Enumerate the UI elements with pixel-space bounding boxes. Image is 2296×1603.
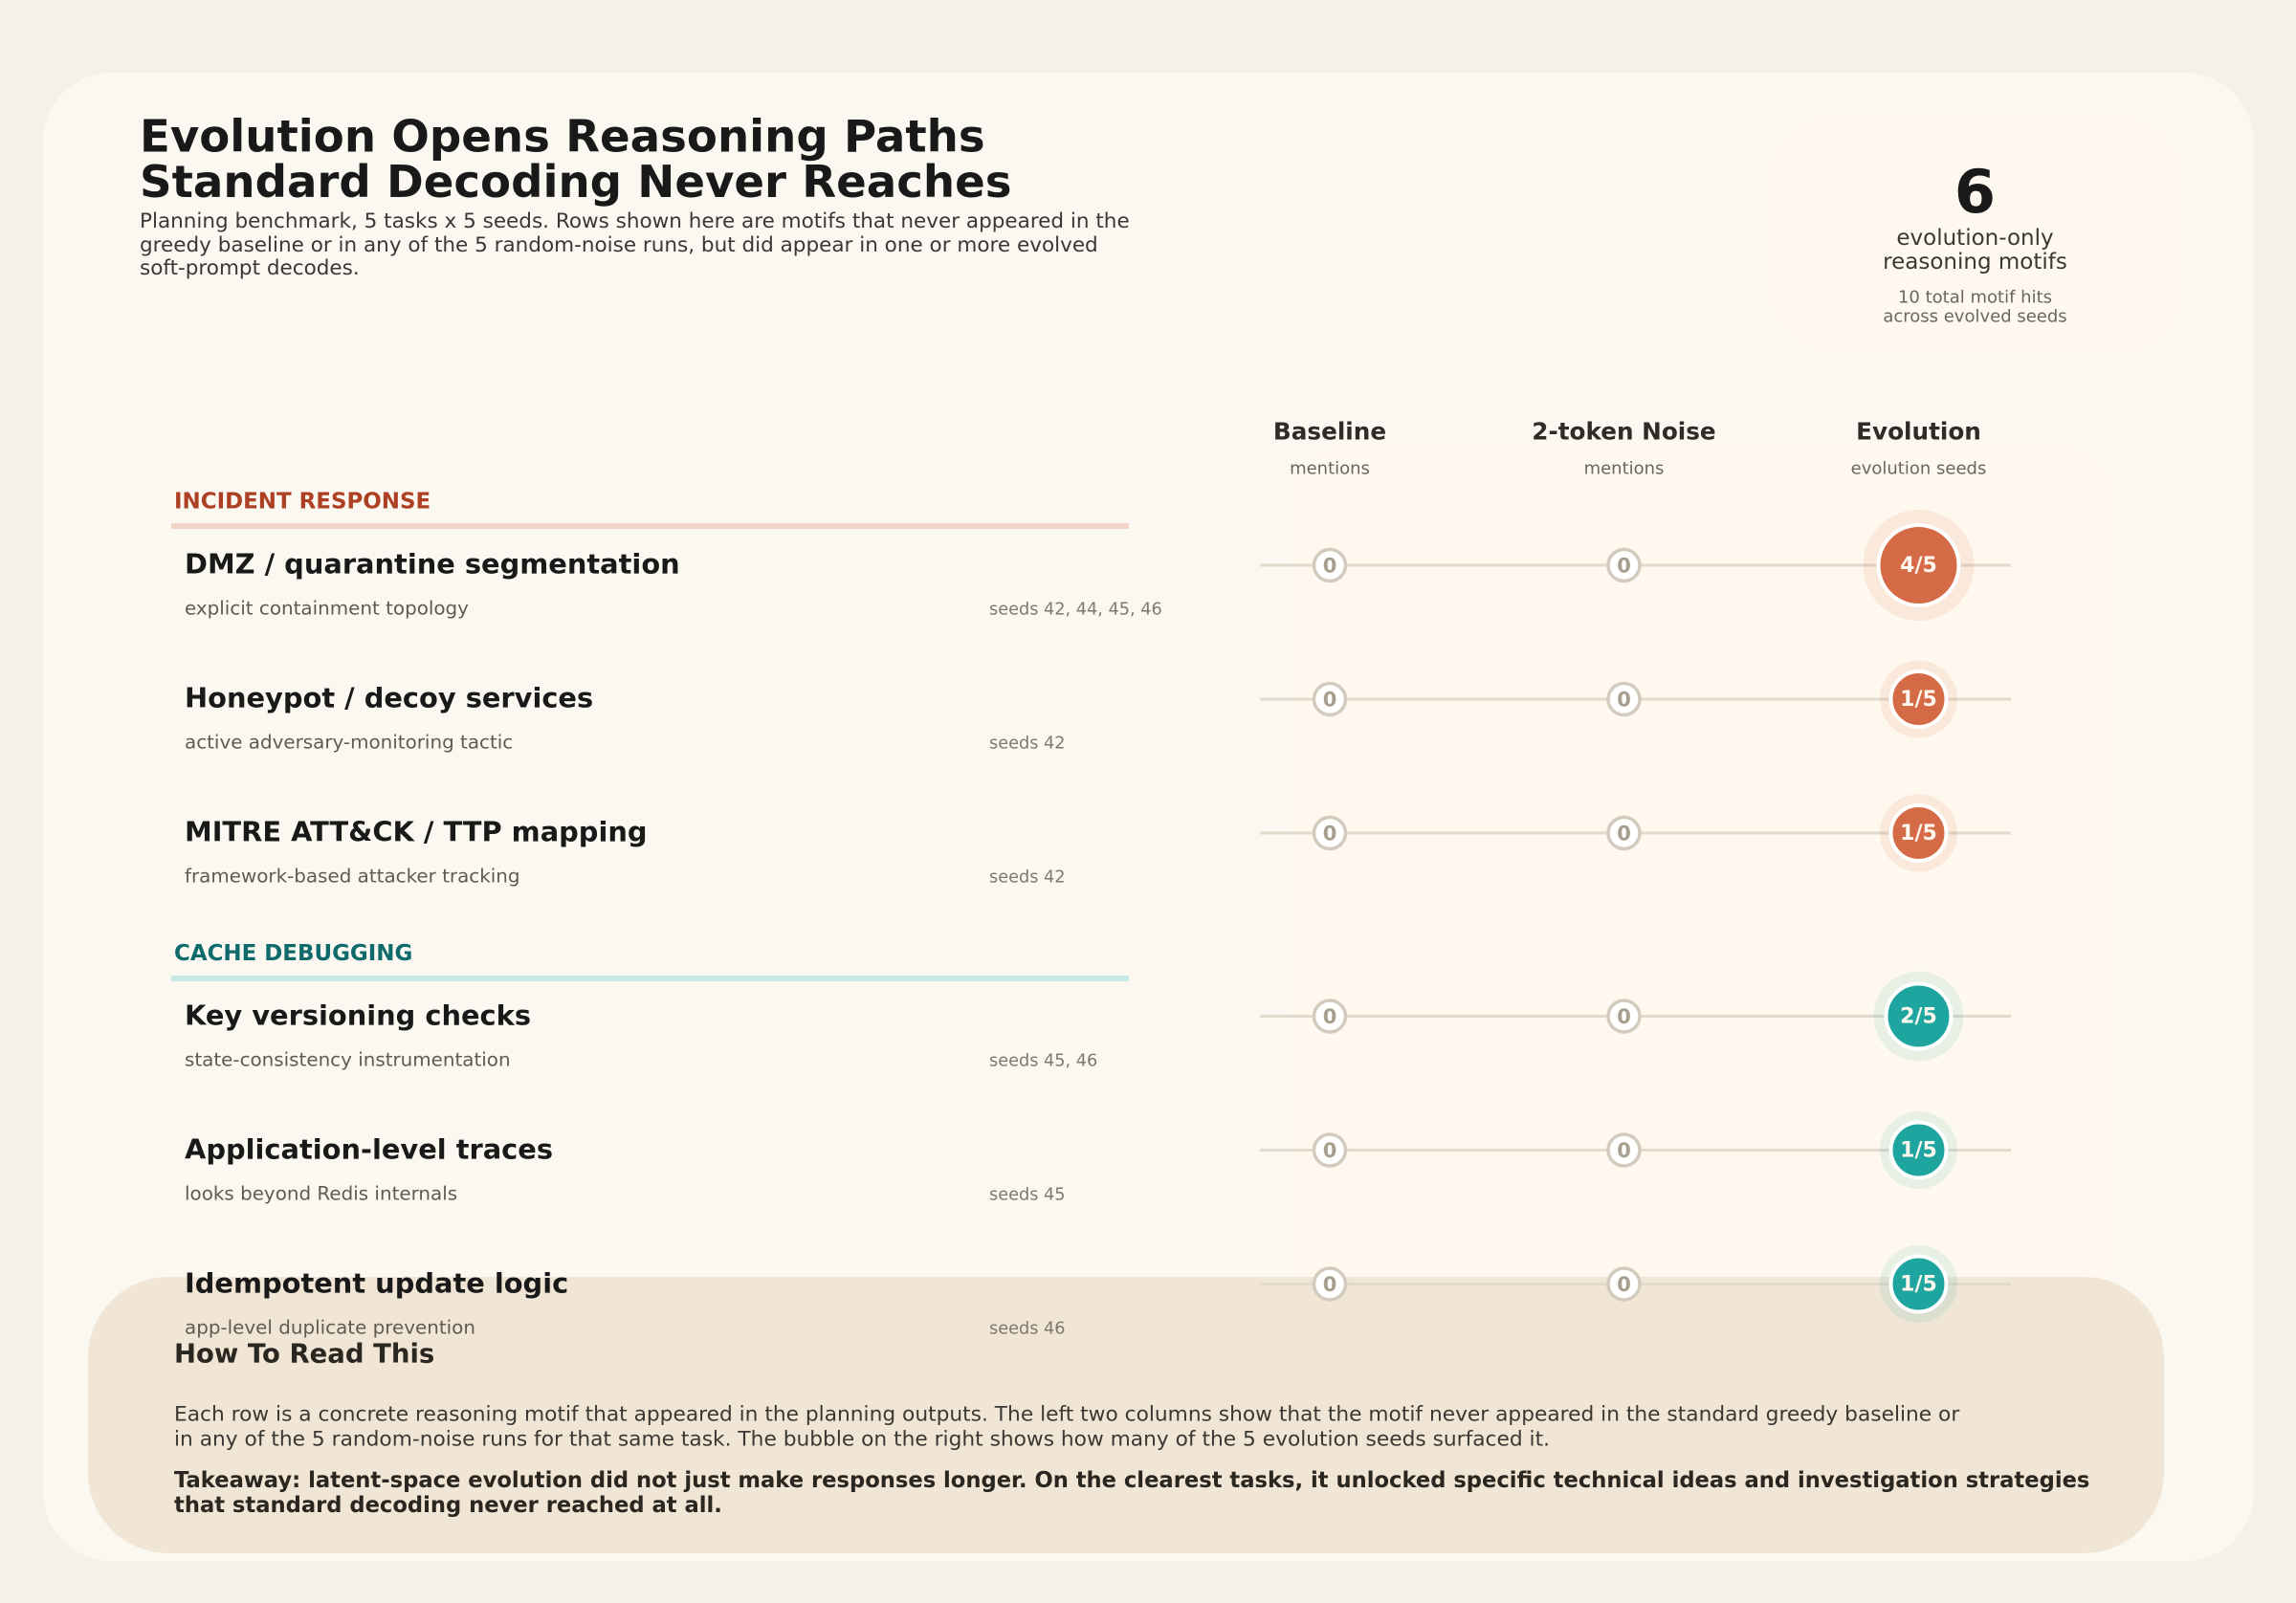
stat label: evolution-only [1896, 226, 2054, 251]
row: Application-level traces: 1/5 [1900, 1138, 1937, 1163]
row: Honeypot / decoy services: Honeypot / decoy services [185, 681, 593, 714]
row: MITRE ATT&CK / TTP mapping: seeds 42 [989, 868, 1066, 888]
how to read body: in any of the 5 random-noise runs for that same task. The bubble on the right shows how many of the 5 evolution seeds surfaced it. [174, 1427, 1550, 1452]
takeaway [174, 1468, 2089, 1518]
row: Honeypot / decoy services: 0 [1323, 689, 1336, 712]
title: Standard Decoding Never Reaches [140, 157, 1012, 209]
column headers: Evolution [1856, 417, 1981, 446]
row: MITRE ATT&CK / TTP mapping: 0 [1323, 823, 1336, 845]
row: DMZ / quarantine segmentation: DMZ / quarantine segmentation [185, 547, 680, 580]
row: Key versioning checks: 0 [1617, 1005, 1631, 1028]
row: Honeypot / decoy services: 0 [1617, 689, 1631, 712]
section heading: incident response: INCIDENT RESPONSE [174, 490, 430, 515]
stat label: reasoning motifs [1883, 250, 2067, 274]
subtitle: soft-prompt decodes. [140, 256, 360, 280]
row: Key versioning checks: state-consistency instrumentation [185, 1048, 511, 1071]
takeaway: that standard decoding never reached at all. [174, 1493, 722, 1518]
row: MITRE ATT&CK / TTP mapping: framework-based attacker tracking [185, 865, 520, 888]
panel: how to read background [88, 1277, 2164, 1553]
row: Application-level traces: 0 [1617, 1139, 1631, 1162]
row: Honeypot / decoy services: 1/5 [1900, 688, 1937, 712]
row: Idempotent update logic: seeds 46 [989, 1320, 1066, 1339]
how to read body: Each row is a concrete reasoning motif that appeared in the planning outputs. The left two columns show that the motif never appeared in the standard greedy baseline or [174, 1402, 1959, 1427]
panel: bubble column background [1289, 442, 2117, 1303]
row: Idempotent update logic: 0 [1323, 1273, 1336, 1296]
row: Application-level traces: 0 [1323, 1139, 1336, 1162]
how to read heading: How To Read This [174, 1339, 434, 1370]
subtitle: greedy baseline or in any of the 5 random-noise runs, but did appear in one or more evolved [140, 233, 1098, 257]
row: Key versioning checks: seeds 45, 46 [989, 1052, 1097, 1071]
row: MITRE ATT&CK / TTP mapping [185, 794, 2011, 888]
row: Key versioning checks: 0 [1323, 1005, 1336, 1028]
row: Application-level traces [185, 1111, 2011, 1205]
subtitle [140, 209, 1130, 280]
takeaway: Takeaway: latent-space evolution did not just make responses longer. On the clearest tasks, it unlocked specific technical ideas and investigation strategies [174, 1468, 2089, 1493]
stat note: across evolved seeds [1883, 306, 2067, 327]
row: Application-level traces: looks beyond Redis internals [185, 1182, 457, 1205]
column headers: evolution seeds [1851, 459, 1986, 478]
row: Idempotent update logic: Idempotent update logic [185, 1266, 568, 1299]
column headers [1273, 417, 1986, 478]
stat label [1883, 226, 2067, 274]
title: Evolution Opens Reasoning Paths [140, 111, 985, 163]
title [140, 111, 1012, 209]
row: MITRE ATT&CK / TTP mapping: 0 [1617, 823, 1631, 845]
stat number: 6 [1954, 157, 1996, 227]
row: Idempotent update logic [185, 1245, 2011, 1339]
row: DMZ / quarantine segmentation: explicit containment topology [185, 597, 469, 620]
subtitle: Planning benchmark, 5 tasks x 5 seeds. Rows shown here are motifs that never appeared in the [140, 209, 1130, 233]
row: DMZ / quarantine segmentation: 0 [1617, 555, 1631, 578]
column headers: mentions [1584, 459, 1664, 478]
panel: stat callout [1766, 112, 2186, 357]
stat note [1883, 287, 2067, 327]
row: Idempotent update logic: 0 [1617, 1273, 1631, 1296]
row: MITRE ATT&CK / TTP mapping: 1/5 [1900, 822, 1937, 845]
row: Application-level traces: Application-level traces [185, 1132, 553, 1165]
column headers: Baseline [1273, 417, 1386, 446]
row: Idempotent update logic: app-level duplicate prevention [185, 1316, 475, 1339]
row: DMZ / quarantine segmentation [185, 510, 2011, 621]
row: DMZ / quarantine segmentation: 0 [1323, 555, 1336, 578]
column headers: 2-token Noise [1532, 417, 1716, 446]
section heading: incident response [171, 490, 1129, 529]
row: Honeypot / decoy services: active adversary-monitoring tactic [185, 731, 513, 754]
row: Key versioning checks: 2/5 [1900, 1004, 1937, 1029]
section heading: cache debugging [171, 941, 1129, 981]
column headers: mentions [1290, 459, 1370, 478]
stat note: 10 total motif hits [1898, 287, 2052, 308]
row: MITRE ATT&CK / TTP mapping: MITRE ATT&CK / TTP mapping [185, 815, 648, 847]
row: Idempotent update logic: 1/5 [1900, 1272, 1937, 1297]
row: Key versioning checks [185, 972, 2011, 1071]
row: DMZ / quarantine segmentation: 4/5 [1900, 554, 1937, 578]
how to read body [174, 1402, 1959, 1452]
section heading: cache debugging: CACHE DEBUGGING [174, 941, 412, 966]
row: Key versioning checks: Key versioning checks [185, 999, 531, 1031]
row: DMZ / quarantine segmentation: seeds 42, 44, 45, 46 [989, 601, 1162, 620]
row: Honeypot / decoy services: seeds 42 [989, 735, 1066, 754]
row: Honeypot / decoy services [185, 660, 2011, 754]
row: Application-level traces: seeds 45 [989, 1186, 1066, 1205]
